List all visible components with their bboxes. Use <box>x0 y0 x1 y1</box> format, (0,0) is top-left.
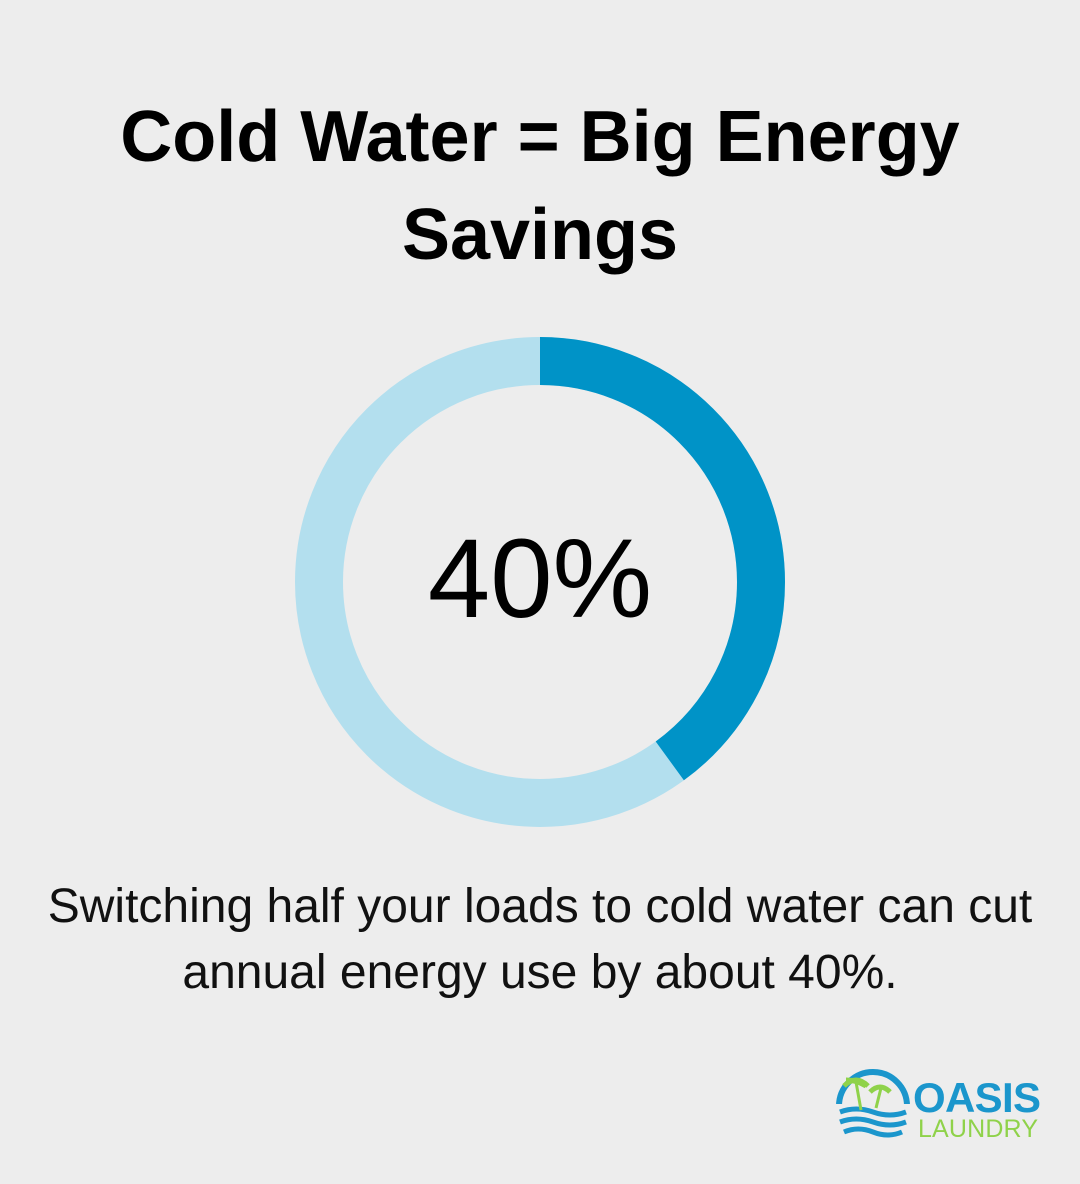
logo <box>836 1069 1041 1143</box>
title: Savings <box>402 195 678 275</box>
donut chart: 40% <box>428 516 652 641</box>
title <box>120 97 960 275</box>
logo: LAUNDRY <box>918 1115 1038 1143</box>
logo: OASIS <box>913 1074 1041 1121</box>
title: Cold Water = Big Energy <box>120 97 960 177</box>
body text <box>48 880 1032 999</box>
body text: Switching half your loads to cold water can cut <box>48 880 1032 933</box>
body text: annual energy use by about 40%. <box>182 946 898 999</box>
